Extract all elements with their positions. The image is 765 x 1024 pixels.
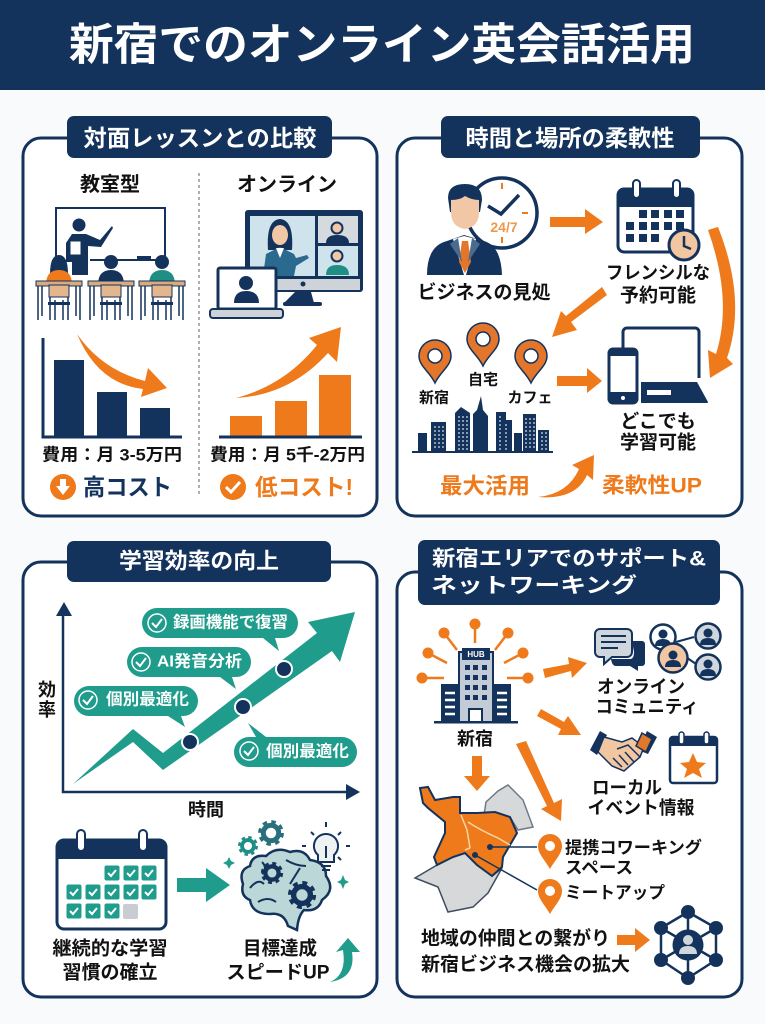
icon: businessperson with clock: [427, 178, 537, 275]
text: 継続的な学習習慣の確立: 習慣の確立: [62, 962, 158, 984]
arrow: down to map: [464, 756, 490, 791]
callout: AI発音分析: [127, 647, 251, 689]
text: 費用 online: 費用：月 5千-2万円: [210, 446, 365, 464]
label: ローカルイベント情報: [588, 778, 694, 818]
arrow: to network: [617, 928, 650, 952]
arrow: rising curve: [538, 455, 594, 497]
text: 最大活用: 最大活用: [440, 474, 530, 498]
axis label: 効率: 率: [38, 700, 56, 720]
callout: 個別最適化 lower: [234, 723, 357, 767]
arrow: to community: [543, 657, 587, 678]
text: 継続的な学習習慣の確立: 継続的な学習: [52, 936, 168, 960]
text: 地域の仲間との繋がり 新宿ビジネス機会の拡大: 地域の仲間との繋がり: [421, 926, 610, 950]
icon: businessperson with clock: 24/7: [490, 219, 518, 235]
text: 目標達成スピードUP: 目標達成: [243, 936, 317, 960]
label: 自宅: 自宅: [468, 370, 498, 388]
icon: community network: [650, 624, 720, 680]
label: ビジネスの見処: ビジネスの見処: [418, 282, 550, 304]
heading: 対面レッスンとの比較: 対面レッスンとの比較: [84, 125, 316, 151]
chart: high-cost bars: [43, 334, 182, 437]
icon: classroom: [36, 208, 185, 320]
location: 提携コワーキングスペース: スペース: [565, 858, 633, 878]
text: 高コスト: 高コスト: [83, 474, 172, 500]
callout: 個別最適化 upper: [74, 686, 198, 727]
panel: 新宿エリアでのサポート＆ネットワーキング: [397, 540, 742, 997]
label: フレンシルな予約可能: フレンシルな: [606, 263, 710, 283]
heading: 学習効率の向上: 学習効率の向上: [119, 548, 279, 574]
callout: 録画機能で復習: 録画機能で復習: [173, 612, 288, 632]
axis label: 効率: [38, 680, 56, 720]
callout: AI発音分析: AI発音分析: [157, 652, 242, 670]
callout: 個別最適化 lower: 個別最適化: [266, 742, 349, 760]
panel: 学習効率の向上: [23, 541, 377, 997]
label: フレンシルな予約可能: 予約可能: [620, 284, 696, 306]
location: ミートアップ: [538, 879, 665, 914]
heading: 新宿エリアでのサポート&ネットワーキング: 新宿エリアでのサポート&: [432, 548, 706, 570]
heading: 対面レッスンとの比較: [67, 116, 332, 158]
text: 低コスト！: 低コスト!: [255, 474, 353, 500]
label: どこでも学習可能: [620, 410, 696, 454]
growth arrow: [73, 612, 355, 784]
label: どこでも学習可能: 学習可能: [620, 430, 696, 454]
icon: people network: [654, 905, 723, 985]
arrow: to map pins: [552, 287, 607, 337]
icon: HUB building: HUB: [467, 650, 485, 659]
heading: 学習効率の向上: [67, 541, 331, 582]
icon: calendar with clock: [618, 180, 699, 260]
icon: habit calendar: [57, 830, 166, 929]
heading: 新宿エリアでのサポート&ネットワーキング: [418, 540, 720, 605]
arrow: to devices: [557, 368, 602, 393]
icon: brain with gears and bulb: [223, 822, 350, 930]
map leader lines: [475, 847, 537, 890]
icon: location pins: [419, 323, 547, 383]
axis label: 時間: 時間: [188, 800, 224, 820]
text: 柔軟性UP: 柔軟性UP: [602, 474, 702, 498]
map: Shinjuku area: [415, 785, 537, 912]
label: 新宿: 新宿: [419, 390, 449, 406]
label: 教室型: 教室型: [80, 173, 140, 196]
text: 継続的な学習習慣の確立: [52, 936, 168, 984]
label: 新宿: 新宿: [457, 729, 493, 749]
title banner: [0, 0, 765, 90]
milestone dots: [182, 661, 292, 750]
panel: 対面レッスンとの比較: [23, 116, 377, 516]
label: オンラインコミュニティ: [596, 677, 698, 717]
chart: efficiency over time: [38, 602, 360, 820]
arrow: to calendar: [550, 209, 603, 234]
arrow: teal rising: [330, 938, 360, 982]
label: オンラインコミュニティ: オンライン: [597, 677, 685, 697]
text: 目標達成スピードUP: [226, 936, 330, 984]
label: カフェ: カフェ: [507, 390, 553, 406]
label: オンライン: オンライン: [237, 174, 337, 196]
chart: low-cost bars: [219, 327, 362, 437]
label: フレンシルな予約可能: [606, 263, 710, 306]
axis label: 効率: 効: [38, 680, 56, 700]
icon: star calendar: [670, 732, 717, 783]
callout: 個別最適化 upper: 個別最適化: [106, 690, 189, 708]
heading: 時間と場所の柔軟性: 時間と場所の柔軟性: [466, 125, 674, 151]
arrow: curved to devices: [708, 227, 735, 378]
icon: check badge: [220, 474, 246, 500]
location: ミートアップ: ミートアップ: [565, 884, 665, 902]
label: ローカルイベント情報: イベント情報: [588, 798, 694, 818]
text: 費用 classroom: 費用：月 3-5万円: [42, 446, 182, 464]
heading: 新宿エリアでのサポート&ネットワーキング: ネットワーキング: [431, 574, 637, 598]
title banner: 新宿でのオンライン英会話活用: [69, 20, 695, 70]
label: ローカルイベント情報: ローカル: [592, 778, 662, 798]
label: オンラインコミュニティ: コミュニティ: [596, 697, 698, 717]
callout: 録画機能で復習: [142, 608, 298, 651]
location: 提携コワーキングスペース: [538, 834, 702, 878]
label: どこでも学習可能: どこでも: [620, 410, 696, 432]
icon: phone and laptop: [609, 328, 708, 403]
text: 目標達成スピードUP: スピードUP: [226, 962, 330, 984]
icon: Shinjuku skyline: [412, 396, 553, 453]
arrow: to events: [537, 709, 581, 735]
text: 地域の仲間との繋がり 新宿ビジネス機会の拡大: 新宿ビジネス機会の拡大: [421, 954, 630, 976]
text: 地域の仲間との繋がり 新宿ビジネス機会の拡大: [421, 926, 630, 976]
heading: 時間と場所の柔軟性: [441, 116, 700, 158]
arrow: teal to brain: [177, 868, 230, 902]
chart axes: [63, 608, 352, 792]
icon: handshake: [590, 731, 657, 771]
panel: 時間と場所の柔軟性: [397, 116, 742, 516]
icon: down arrow badge: [50, 474, 76, 500]
icon: video conference monitor: [210, 210, 363, 318]
location: 提携コワーキングスペース: 提携コワーキング: [565, 838, 702, 858]
arrow: to coworking pins: [516, 741, 562, 821]
icon: online chat bubbles: [595, 629, 645, 671]
icon: HUB building: [416, 618, 534, 724]
